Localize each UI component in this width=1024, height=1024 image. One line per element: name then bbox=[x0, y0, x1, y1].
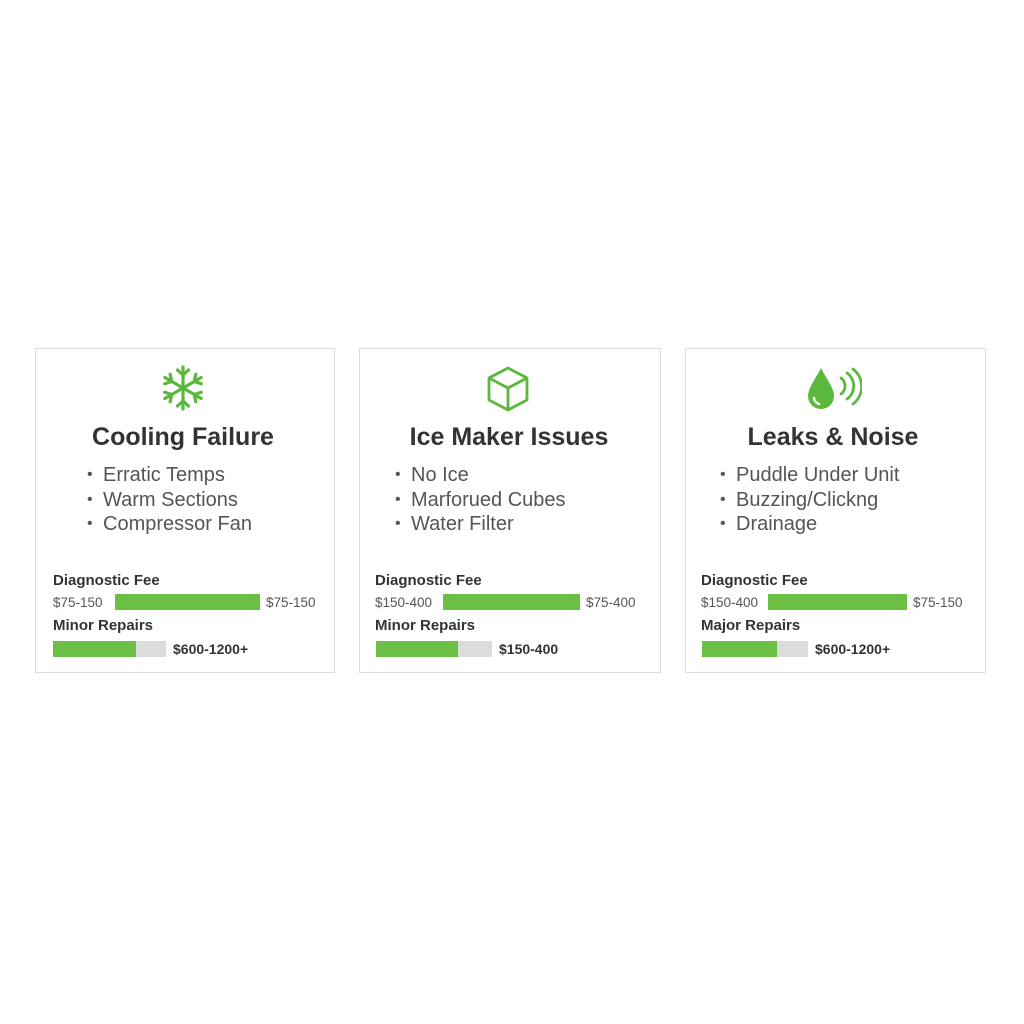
price bar: diagnostic 3: $150-400 bbox=[701, 595, 758, 610]
bullets: cooling: Erratic Temps bbox=[103, 464, 225, 486]
bullets: ice maker: Water Filter bbox=[411, 513, 514, 535]
bullets: ice maker: Marforued Cubes bbox=[411, 488, 566, 510]
icon: ice cube bbox=[488, 366, 528, 412]
bullets: leaks: Puddle Under Unit bbox=[736, 464, 899, 486]
price bar: diagnostic 2: $150-400 bbox=[375, 595, 432, 610]
bullets: leaks bbox=[720, 464, 900, 535]
title: Ice Maker Issues: Ice Maker Issues bbox=[410, 423, 608, 451]
label: diagnostic fee 2: Diagnostic Fee bbox=[375, 572, 482, 589]
price bar: diagnostic 3: $75-150 bbox=[913, 595, 963, 610]
bullets: cooling: Compressor Fan bbox=[103, 513, 252, 535]
price bar: diagnostic 1: $75-150 bbox=[266, 595, 316, 610]
bullets: ice maker: No Ice bbox=[411, 464, 469, 486]
label: minor repairs 2: Minor Repairs bbox=[375, 617, 475, 634]
price bar: diagnostic 1: $75-150 bbox=[53, 595, 103, 610]
price bar: diagnostic 1 bbox=[53, 594, 316, 610]
price bar: diagnostic 2: $75-400 bbox=[586, 595, 636, 610]
bullets: cooling bbox=[88, 464, 252, 535]
label: minor repairs 1: Minor Repairs bbox=[53, 617, 153, 634]
bullets: leaks: Buzzing/Clickng bbox=[736, 488, 878, 510]
icon: snowflake bbox=[163, 365, 203, 411]
price bar: minor repairs 2: $150-400 bbox=[499, 641, 558, 657]
price bar: major repairs 3 bbox=[702, 641, 890, 657]
panel: ice maker issues bbox=[359, 348, 661, 673]
price bar: major repairs 3: $600-1200+ bbox=[815, 641, 890, 657]
title: Cooling Failure: Cooling Failure bbox=[92, 423, 274, 451]
panel: leaks & noise bbox=[685, 348, 986, 673]
label: diagnostic fee 3: Diagnostic Fee bbox=[701, 572, 808, 589]
price bar: minor repairs 1 bbox=[53, 641, 248, 657]
title: Leaks & Noise: Leaks & Noise bbox=[748, 423, 918, 451]
price bar: diagnostic 3 bbox=[701, 594, 963, 610]
price bar: minor repairs 2 bbox=[376, 641, 558, 657]
price bar: diagnostic 2 bbox=[375, 594, 636, 610]
label: major repairs 3: Major Repairs bbox=[701, 617, 800, 634]
bullets: ice maker bbox=[396, 464, 566, 535]
label: diagnostic fee 1: Diagnostic Fee bbox=[53, 572, 160, 589]
price bar: minor repairs 1: $600-1200+ bbox=[173, 641, 248, 657]
panel: cooling failure bbox=[35, 348, 335, 673]
bullets: leaks: Drainage bbox=[736, 513, 817, 535]
icon: water drop with sound waves bbox=[808, 368, 862, 409]
bullets: cooling: Warm Sections bbox=[103, 488, 238, 510]
